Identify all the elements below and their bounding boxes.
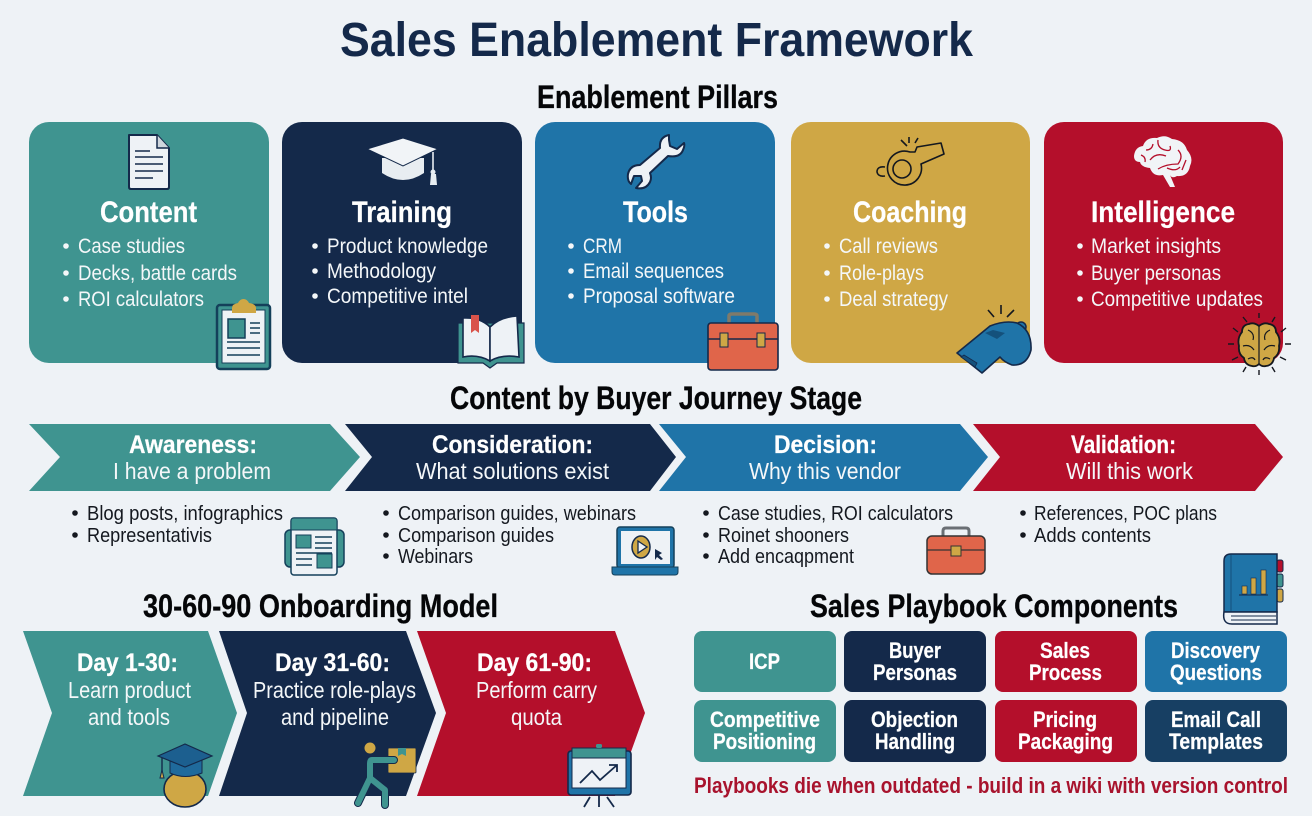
list: consideration content: Webinars — [398, 545, 473, 568]
chevron: day 61-90 — [417, 631, 645, 807]
list: awareness content: Blog posts, infographics — [87, 502, 283, 525]
heading: buyer journey: Content by Buyer Journey Stage — [450, 380, 862, 416]
list: decision content: Add encaqpment — [718, 545, 854, 568]
list: decision content: Roinet shooners — [718, 524, 849, 547]
chevron: consideration: What solutions exist — [416, 458, 610, 484]
tile: competitive positioning: Positioning — [713, 729, 816, 754]
panel: intelligence — [1044, 122, 1291, 375]
heading: onboarding: 30-60-90 Onboarding Model — [143, 588, 498, 624]
tile: email call templates — [1145, 700, 1287, 762]
chevron: validation: Validation: — [1071, 431, 1176, 459]
icon: chart board — [568, 744, 631, 807]
list: consideration content — [383, 502, 636, 568]
chevron: day 61-90: Perform carry — [476, 677, 597, 703]
icon: playbook — [1224, 554, 1283, 624]
icon: graduation cap — [367, 138, 438, 185]
bullet list: content: ROI calculators — [78, 288, 204, 311]
bullet list: content: Case studies — [78, 235, 185, 258]
heading: sales playbook: Sales Playbook Components — [810, 588, 1178, 624]
bullet list: tools: Proposal software — [583, 285, 735, 308]
tile: sales process — [995, 631, 1137, 692]
tile: sales process: Sales — [1040, 638, 1090, 663]
chevron: decision: Decision: — [774, 431, 877, 459]
bullet list: coaching: Role-plays — [839, 262, 924, 285]
list: validation content: References, POC plans — [1034, 502, 1217, 525]
tile: email call templates: Templates — [1169, 729, 1263, 754]
chevron: day 1-30: Learn product — [68, 677, 192, 703]
heading: intelligence: Intelligence — [1091, 196, 1235, 229]
tile: discovery questions: Discovery — [1171, 638, 1261, 663]
icon: document — [129, 135, 169, 189]
icon: graduate — [158, 744, 212, 807]
bullet list: intelligence — [1077, 235, 1263, 311]
tile: pricing packaging — [995, 700, 1137, 762]
bullet list: tools: CRM — [583, 235, 622, 258]
bullet list: intelligence: Market insights — [1091, 235, 1221, 258]
heading: training: Training — [352, 196, 452, 229]
icon: gold brain — [1228, 313, 1291, 375]
bullet list: training — [312, 235, 488, 308]
list: validation content: Adds contents — [1034, 524, 1151, 547]
tile: objection handling: Objection — [871, 707, 958, 732]
icon: open book — [458, 315, 524, 368]
bullet list: training: Methodology — [327, 260, 436, 283]
list: validation content — [1020, 502, 1217, 547]
tile: buyer personas: Personas — [873, 660, 957, 685]
bullet list: intelligence: Buyer personas — [1091, 262, 1221, 285]
bullet list: content — [63, 235, 237, 311]
tile: sales process: Process — [1029, 660, 1102, 685]
bullet list: coaching — [824, 235, 948, 311]
icon: clipboard — [217, 299, 270, 369]
bullet list: training: Competitive intel — [327, 285, 468, 308]
tile: competitive positioning: Competitive — [710, 707, 820, 732]
tile: email call templates: Email Call — [1171, 707, 1261, 732]
tile: buyer personas — [844, 631, 986, 692]
heading: coaching: Coaching — [853, 196, 967, 229]
chevron: decision — [659, 424, 988, 491]
list: consideration content: Comparison guides — [398, 524, 554, 547]
bullet list: training: Product knowledge — [327, 235, 488, 258]
chevron: day 1-30 — [23, 631, 237, 807]
chevron: day 31-60: Day 31-60: — [275, 649, 390, 677]
chevron: day 31-60: Practice role-plays — [253, 677, 416, 703]
list: decision content — [703, 502, 953, 568]
chevron: awareness — [29, 424, 360, 491]
chevron: day 61-90: quota — [511, 704, 562, 730]
icon: laptop — [612, 527, 678, 575]
tile: pricing packaging: Packaging — [1018, 729, 1113, 754]
icon: briefcase — [927, 528, 985, 574]
icon: toolbox — [708, 314, 778, 370]
panel: training — [282, 122, 524, 368]
chevron: day 61-90: Day 61-90: — [477, 649, 592, 677]
chevron: day 1-30: Day 1-30: — [77, 649, 178, 677]
heading: enablement pillars: Enablement Pillars — [537, 79, 778, 115]
tile: pricing packaging: Pricing — [1033, 707, 1097, 732]
chevron: validation — [973, 424, 1283, 491]
chevron: day 31-60 — [219, 631, 436, 805]
chevron: consideration: Consideration: — [432, 431, 593, 459]
list: awareness content — [72, 502, 283, 547]
list: decision content: Case studies, ROI calculators — [718, 502, 953, 525]
icon: wrench — [628, 135, 684, 188]
heading: content: Content — [100, 196, 197, 229]
icon: person carrying box — [358, 742, 416, 805]
bullet list: tools — [568, 235, 735, 308]
tile: ICP: ICP — [749, 649, 780, 674]
bullet list: intelligence: Competitive updates — [1091, 288, 1263, 311]
title: Sales Enablement Framework — [340, 14, 973, 67]
bullet list: coaching: Call reviews — [839, 235, 938, 258]
tile: buyer personas: Buyer — [889, 638, 941, 663]
bullet list: tools: Email sequences — [583, 260, 724, 283]
panel: tools — [535, 122, 778, 370]
tile: objection handling — [844, 700, 986, 762]
list: awareness content: Representativis — [87, 524, 212, 547]
chevron: day 31-60: and pipeline — [281, 704, 389, 730]
tile: discovery questions — [1145, 631, 1287, 692]
panel: content — [29, 122, 270, 369]
chevron: day 1-30: and tools — [88, 704, 170, 730]
chevron: validation: Will this work — [1066, 458, 1193, 484]
bullet list: content: Decks, battle cards — [78, 262, 237, 285]
heading: tools: Tools — [623, 196, 688, 229]
tile: competitive positioning — [694, 700, 836, 762]
icon: blue whistle — [957, 305, 1031, 373]
tile: objection handling: Handling — [875, 729, 955, 754]
panel: coaching — [791, 122, 1031, 373]
chevron: decision: Why this vendor — [749, 458, 901, 484]
tile: discovery questions: Questions — [1170, 660, 1262, 685]
bullet list: coaching: Deal strategy — [839, 288, 948, 311]
chevron: awareness: I have a problem — [113, 458, 271, 484]
icon: whistle outline — [877, 137, 944, 185]
icon: brain — [1134, 136, 1191, 187]
icon: newsletter — [285, 518, 344, 575]
chevron: awareness: Awareness: — [129, 431, 257, 459]
chevron: consideration — [345, 424, 676, 491]
list: consideration content: Comparison guides, webinars — [398, 502, 636, 525]
tile: ICP — [694, 631, 836, 692]
